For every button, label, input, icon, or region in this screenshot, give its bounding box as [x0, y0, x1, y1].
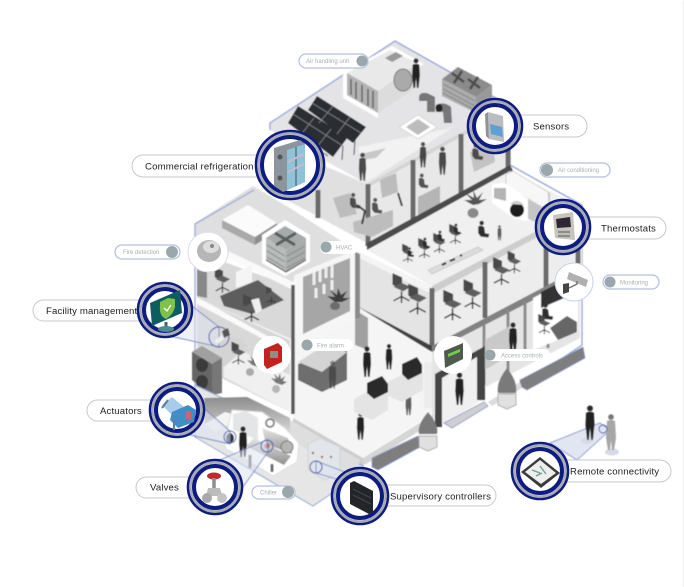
- person with tablet: [599, 414, 616, 450]
- lobby slab edge: [293, 418, 363, 466]
- solar panels: [288, 96, 366, 160]
- page edge line: [683, 0, 684, 587]
- icon: card reader: [444, 343, 463, 368]
- label pill: remote connectivity: [550, 460, 671, 482]
- upper floor people: [350, 142, 483, 214]
- office workers: [402, 221, 502, 262]
- chiller: [224, 410, 299, 476]
- lower room: [197, 298, 290, 412]
- label pill: supervisory controllers: [370, 485, 496, 506]
- label pill: thermostats: [570, 217, 666, 239]
- tag: access controls: Access controls: [501, 354, 543, 360]
- upper floor: [287, 106, 513, 250]
- callout: supervisory controllers: [332, 468, 388, 524]
- connector: valves: [215, 440, 273, 505]
- icon: actuator: [162, 397, 196, 430]
- label pill: supervisory controllers: Supervisory controllers: [390, 492, 491, 502]
- icon: wall sensor: [485, 112, 504, 142]
- callout: actuators: [150, 383, 204, 437]
- lobby floor: [293, 305, 434, 458]
- remote users: [550, 405, 619, 460]
- callout: remote connectivity: [512, 443, 568, 499]
- tag: fire detection: Fire detection: [123, 250, 159, 256]
- outdoor condenser: [192, 346, 222, 395]
- icon: monitor with shield: [150, 290, 182, 332]
- upper floor walls: [287, 150, 367, 243]
- upper room: [197, 252, 293, 340]
- lower room left wall: [355, 250, 432, 347]
- conference table: [428, 247, 483, 274]
- icon: controller box: [350, 481, 373, 514]
- monitoring room: [533, 274, 578, 350]
- entrance door: [435, 346, 485, 427]
- tag: monitoring: [603, 275, 659, 289]
- connector: facility management: [165, 285, 230, 347]
- duct elbows: [419, 93, 452, 123]
- entrance mat: [444, 402, 488, 428]
- icon: refrigerated cabinet: [274, 140, 305, 192]
- icon: tablet: [521, 457, 560, 488]
- callout: thermostats: [536, 200, 590, 254]
- connector: actuators: [177, 385, 236, 444]
- ground facade: [432, 276, 580, 415]
- callout: facility management: [138, 283, 192, 337]
- technician on roof: [412, 58, 420, 88]
- basement floor: [195, 385, 363, 506]
- floor edge: [432, 207, 582, 294]
- label pill: sensors: [505, 115, 587, 137]
- plant: [464, 190, 487, 218]
- lower room right wall: [432, 207, 582, 347]
- lobby level: [293, 250, 585, 470]
- tag: air handling unit: Air handling unit: [306, 59, 349, 65]
- street benches: [372, 347, 585, 470]
- label pill: remote connectivity: Remote connectivity: [570, 466, 659, 478]
- fire detection badge: [188, 232, 228, 272]
- roof deck: [270, 41, 510, 184]
- tag: access controls: [484, 349, 550, 361]
- icon: thermostat: [553, 212, 575, 240]
- office back wall: [503, 172, 550, 230]
- middle office block: [353, 171, 582, 354]
- reception computer desk: [210, 335, 287, 393]
- library room: [295, 250, 360, 346]
- icon: smoke detector: [197, 240, 221, 262]
- pillar: [424, 362, 432, 408]
- tag: fire alarm: Fire alarm: [317, 344, 344, 350]
- lower room columns: [432, 212, 578, 350]
- icon: gate valve: [202, 472, 227, 503]
- lobby people: [329, 344, 412, 440]
- label pill: facility management: [33, 300, 163, 321]
- label pill: valves: Valves: [150, 482, 179, 494]
- label pill: sensors: Sensors: [533, 122, 569, 132]
- label pill: commercial refrigeration: Commercial refrigeration: [145, 162, 254, 172]
- lounge seating: [333, 142, 495, 237]
- monitoring badge: [555, 263, 593, 301]
- pump spot: [226, 433, 234, 443]
- roof level: [270, 41, 582, 372]
- tag: air conditioning: Air conditioning: [558, 168, 599, 174]
- control panel: [308, 438, 340, 480]
- floor shadows: [581, 438, 593, 444]
- air handling unit: [343, 46, 424, 118]
- callout: valves: [188, 460, 242, 514]
- upper room office furniture: [215, 265, 284, 322]
- connector: supervisory controllers: [310, 461, 345, 480]
- tag: chiller: [252, 486, 295, 499]
- label pill: valves: [136, 477, 206, 498]
- meeting room chairs: [392, 251, 521, 320]
- reception desk: [298, 350, 347, 392]
- ceiling cassette: [399, 115, 437, 139]
- label pill: thermostats: Thermostats: [601, 224, 656, 234]
- office floor: [367, 171, 582, 286]
- label pill: actuators: [87, 400, 162, 421]
- label pill: commercial refrigeration: [132, 155, 267, 177]
- tag: monitoring: Monitoring: [620, 280, 648, 286]
- facade window panels: [484, 290, 548, 385]
- cooling units: [442, 67, 492, 113]
- connection cone: [550, 423, 610, 460]
- basement shadow wall: [204, 397, 290, 436]
- callout: sensors: [468, 99, 522, 153]
- wing roof: [195, 186, 355, 284]
- tag: chiller: Chiller: [260, 490, 277, 496]
- icon: fire alarm panel: [264, 343, 282, 369]
- planters: [419, 368, 516, 451]
- lobby desks: [354, 357, 423, 420]
- person in dark suit: [586, 405, 594, 440]
- access control badge: [434, 336, 472, 374]
- tag: fire detection: [115, 245, 180, 259]
- mid slab: [353, 305, 432, 352]
- label pill: actuators: Actuators: [100, 406, 142, 417]
- icon: cctv camera: [563, 272, 588, 294]
- wall air conditioner: [492, 171, 549, 221]
- upper floor slab: [367, 165, 513, 250]
- tag: HVAC: HVAC: [336, 246, 353, 252]
- roof vent: [361, 148, 386, 160]
- callout: commercial refrigeration: [256, 131, 324, 199]
- tag: air handling unit: [299, 54, 368, 68]
- tag: HVAC: [320, 241, 358, 254]
- upper floor columns: [318, 112, 508, 246]
- fire alarm badge: [253, 336, 291, 374]
- technician: [239, 426, 247, 457]
- box on wing roof: [222, 205, 277, 245]
- valve spot: [264, 444, 270, 448]
- left wing: [192, 186, 355, 435]
- office table items: [442, 255, 462, 265]
- tag: air conditioning: [540, 163, 610, 177]
- label pill: facility management: Facility management: [46, 306, 138, 317]
- lobby back wall: [355, 310, 368, 350]
- tag: fire alarm: [301, 339, 353, 351]
- plant room basement: [195, 385, 363, 506]
- wing divider wall: [291, 285, 295, 414]
- HVAC rooftop unit: [262, 220, 310, 276]
